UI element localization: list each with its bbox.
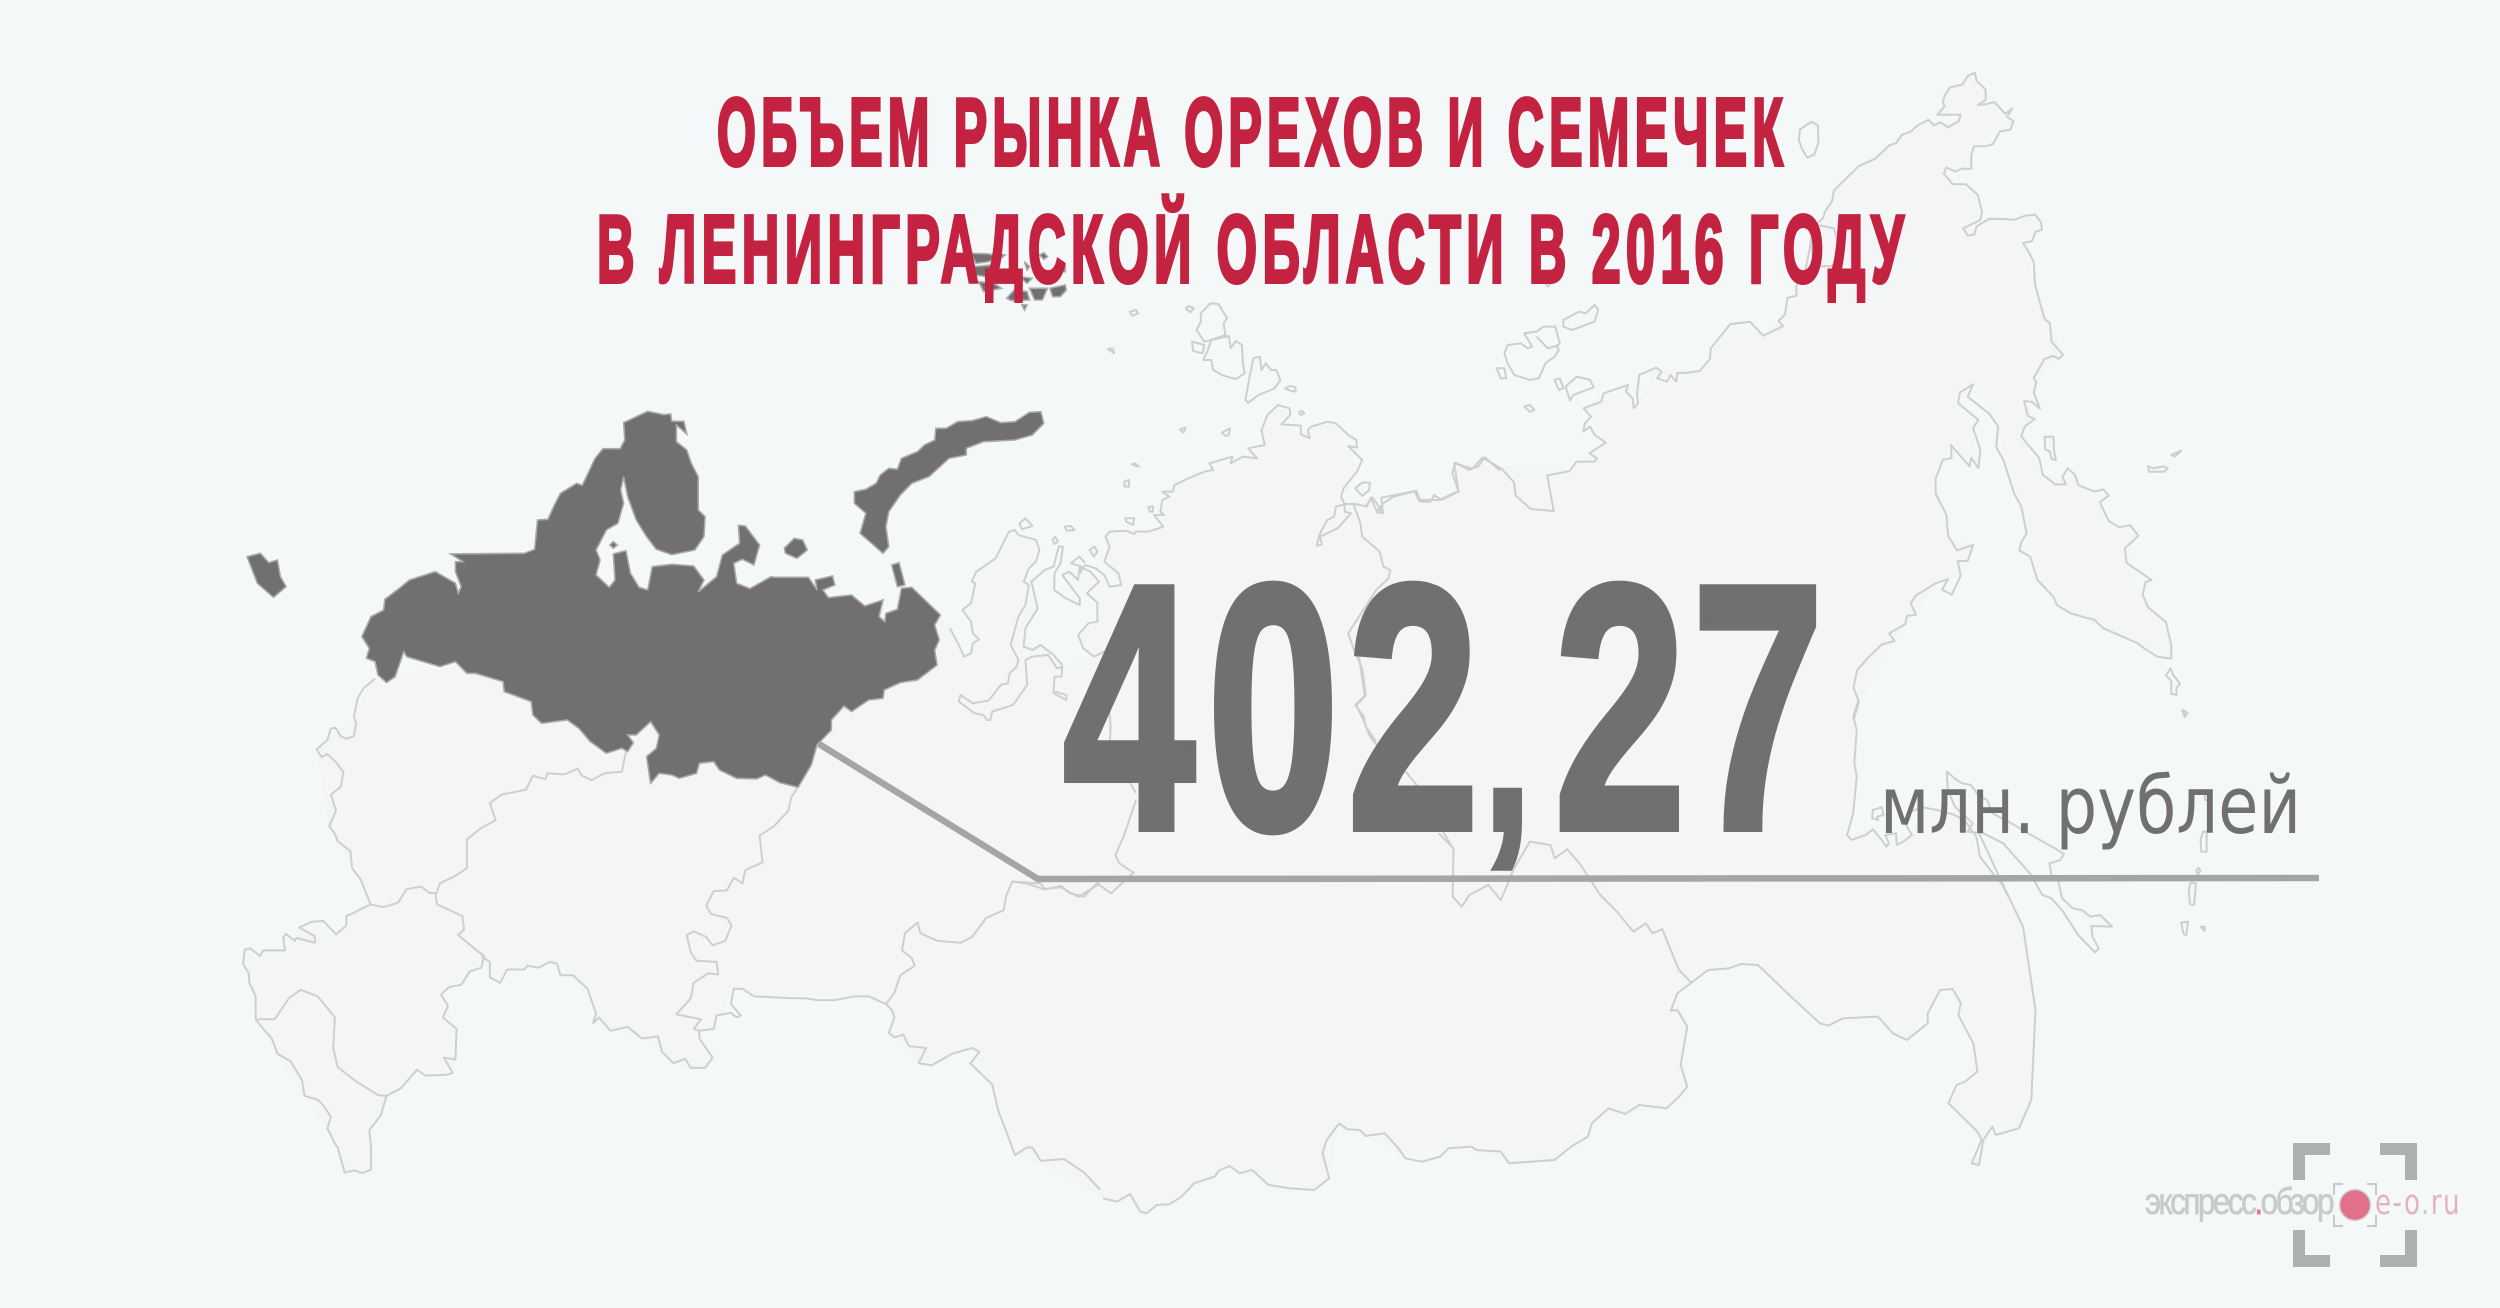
map: Northwestern federal district highlighted — [247, 411, 1044, 787]
map: southern Siberia and Far East borders — [1013, 800, 2035, 1213]
map: Sakhalin and Okhotsk coast — [1847, 700, 2208, 952]
map: north Yakutia coast and New Siberian Islands — [1496, 280, 1700, 470]
logo dot — [2340, 1190, 2370, 1220]
logo inner brackets — [2334, 1184, 2376, 1226]
logo wordmark right: e-o.ru — [2375, 1183, 2461, 1223]
logo frame corners — [2293, 1143, 2417, 1267]
main figure: , — [1484, 603, 1531, 882]
unit label: млн. рублей — [1880, 760, 2301, 852]
title — [597, 79, 1909, 303]
map: Franz Josef Land islands — [971, 253, 1066, 310]
map: southwest borders — [243, 679, 1100, 1190]
map: east Siberian coast behind figure — [1356, 458, 1570, 850]
main figure: 402 — [1063, 513, 1479, 903]
map: Yamal, Taymyr and Severnaya Zemlya — [950, 303, 1500, 793]
map: Russia land fill — [245, 73, 2171, 1213]
main figure: 27 — [1554, 513, 1824, 903]
logo wordmark left: экспресс.обзор — [2145, 1181, 2334, 1222]
logo: express-obzor — [2145, 1143, 2461, 1267]
callout leader line — [819, 744, 2319, 879]
map: Chukotka, Kamchatka and northeast coast — [1700, 73, 2187, 720]
